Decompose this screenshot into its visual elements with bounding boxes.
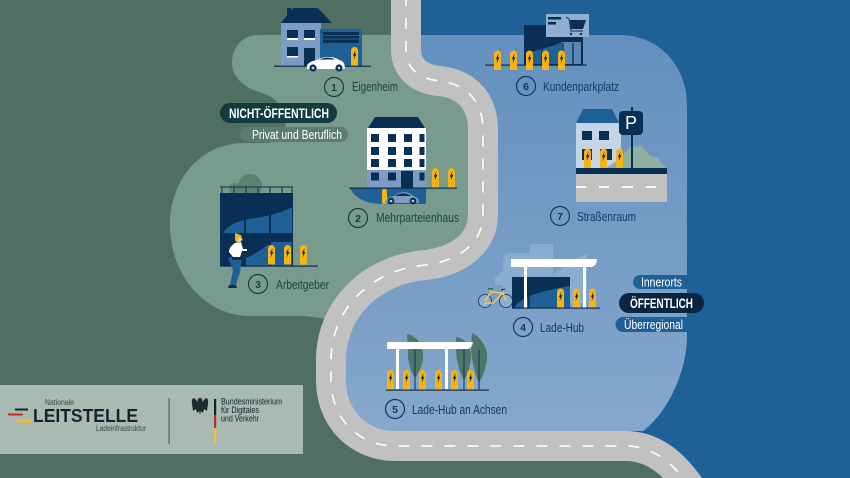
label: Lade-Hub: Lade-Hub xyxy=(540,320,584,335)
item 7: Straßenraum xyxy=(550,107,667,226)
number badge 6: 6 xyxy=(523,81,529,93)
number badge 3: 3 xyxy=(255,279,261,291)
logo: Bundesministerium für Digitales und Verkehr: für Digitales xyxy=(221,405,259,416)
item 6: Kundenparkplatz xyxy=(485,14,619,96)
number badge 4: 4 xyxy=(520,322,526,334)
icon: supermarket with chargers xyxy=(485,14,589,70)
icon: office building with chargers and person xyxy=(220,174,318,288)
logo: Nationale Leitstelle: Nationale xyxy=(45,398,74,407)
item 2: Mehrparteienhaus xyxy=(348,117,459,228)
label: Mehrparteienhaus: Mehrparteienhaus xyxy=(376,210,459,225)
number badge 1: 1 xyxy=(331,82,337,94)
callout: Öffentlich xyxy=(616,275,704,332)
icon: apartment building with underground garage xyxy=(349,117,457,204)
logo: Bundesministerium für Digitales und Verkehr: und Verkehr xyxy=(221,414,259,424)
icon: street with house and parking sign: P xyxy=(625,113,637,133)
icon: charging hub with bicycle xyxy=(478,244,600,309)
icon: house with garage and car xyxy=(274,8,371,72)
item 4: Lade-Hub xyxy=(478,244,600,336)
number badge 7: 7 xyxy=(557,211,563,223)
pill: Privat und Beruflich: Privat und Beruflich xyxy=(252,128,342,142)
pill: Innerorts: Innerorts xyxy=(641,276,682,290)
logo: Nationale Leitstelle: Ladeinfrastruktur xyxy=(96,424,146,433)
logo: Bundesministerium für Digitales und Verkehr xyxy=(192,396,282,443)
icon: highway charging hub with trees xyxy=(386,333,489,391)
number badge 2: 2 xyxy=(355,213,361,225)
pill: Nicht-öffentlich: NICHT-ÖFFENTLICH xyxy=(229,106,329,121)
logo: Bundesministerium für Digitales und Verkehr: Bundesministerium xyxy=(221,396,282,408)
panel: non-public light green zone xyxy=(170,35,483,320)
logo: Nationale Leitstelle xyxy=(8,398,146,433)
panel: public light blue zone xyxy=(331,35,687,431)
panel: logos xyxy=(0,385,303,454)
logo: Nationale Leitstelle: LEITSTELLE xyxy=(33,406,138,426)
item 5: Lade-Hub an Achsen xyxy=(386,333,507,418)
label: Lade-Hub an Achsen: Lade-Hub an Achsen xyxy=(412,402,507,417)
number badge 5: 5 xyxy=(392,404,398,416)
label: Eigenheim: Eigenheim xyxy=(352,79,398,94)
item 3: Arbeitgeber xyxy=(220,174,330,294)
label: Kundenparkplatz: Kundenparkplatz xyxy=(543,79,619,94)
label: Arbeitgeber: Arbeitgeber xyxy=(276,277,330,292)
icon: federal eagle xyxy=(192,398,208,415)
pill: Öffentlich: ÖFFENTLICH xyxy=(630,296,693,311)
callout: Nicht-öffentlich xyxy=(220,103,348,142)
label: Straßenraum: Straßenraum xyxy=(577,209,636,224)
pill: Überregional: Überregional xyxy=(624,318,683,332)
item 1: Eigenheim xyxy=(274,8,398,96)
road xyxy=(331,0,692,478)
